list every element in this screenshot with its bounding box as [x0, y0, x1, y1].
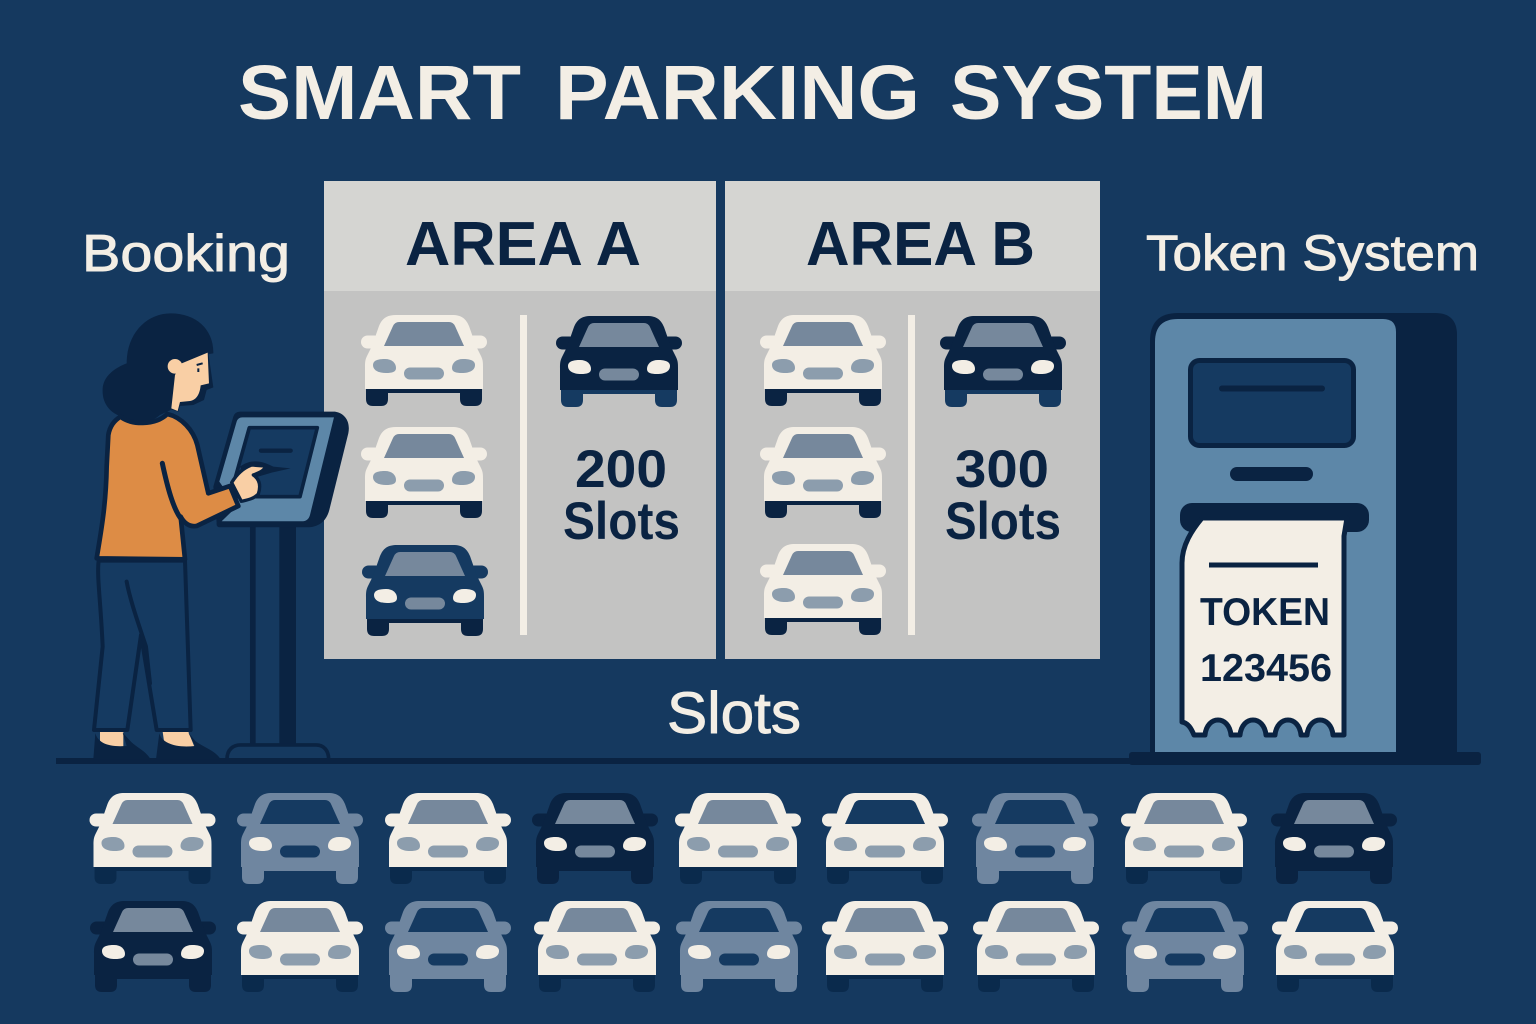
car 15 [822, 901, 948, 992]
label: 200 slots: 200 [575, 440, 667, 499]
heading: Token System: Token System [1146, 225, 1479, 281]
car 13 [534, 901, 660, 992]
car row 1 [90, 793, 1397, 884]
car 16 [973, 901, 1099, 992]
kiosk screen [213, 412, 349, 527]
car row 2 [90, 901, 1398, 992]
ticket text: TOKEN: TOKEN [1200, 591, 1330, 634]
car: Area A navy [362, 545, 488, 636]
car 12 [385, 901, 511, 992]
title: PARKING [555, 50, 920, 136]
car 8 [1121, 793, 1247, 884]
title: SYSTEM [950, 50, 1267, 136]
token machine [1129, 313, 1481, 765]
label: 300 slots: 300 [955, 440, 1049, 499]
car: Area A white 1 [361, 315, 487, 406]
ticket text: number: 123456 [1200, 647, 1332, 690]
hand [232, 465, 265, 501]
car 18 [1272, 901, 1398, 992]
feet and shoes [93, 732, 221, 759]
car: Area B white 2 [760, 427, 886, 518]
car 4 [532, 793, 658, 884]
hair [103, 313, 213, 423]
heading: Area A: AREA A [405, 210, 641, 279]
person at booking kiosk [93, 313, 349, 759]
panel: Area B [725, 181, 1100, 659]
car 7 [972, 793, 1098, 884]
label: Area B slots word: Slots [945, 492, 1061, 551]
car: Area A white 2 [361, 427, 487, 518]
car: Area B white 1 [760, 315, 886, 406]
car: Area A dark [556, 316, 682, 407]
trousers [94, 561, 191, 730]
car 5 [675, 793, 801, 884]
button slot [1230, 467, 1313, 481]
trouser fold [127, 582, 150, 683]
car 6 [822, 793, 948, 884]
car 9 [1271, 793, 1397, 884]
machine base [1129, 752, 1481, 765]
machine body [1150, 313, 1457, 760]
machine screen [1190, 360, 1354, 446]
ground line [56, 758, 1136, 764]
printer slot [1180, 503, 1369, 532]
car 3 [385, 793, 511, 884]
car: Area B dark [940, 316, 1066, 407]
ticket [1182, 518, 1347, 735]
car 2 [237, 793, 363, 884]
label: Area A slots word: Slots [563, 492, 680, 551]
heading: Area B: AREA B [806, 210, 1035, 279]
heading: Slots: Slots [667, 681, 801, 746]
car 11 [237, 901, 363, 992]
car 14 [676, 901, 802, 992]
car: Area B white 3 [760, 544, 886, 635]
heading: Booking: Booking [82, 225, 290, 283]
title: SMART [238, 50, 521, 136]
kiosk stand [227, 525, 329, 759]
car 1 [90, 793, 216, 884]
car 10 [90, 901, 216, 992]
title [238, 50, 1267, 136]
car 17 [1122, 901, 1248, 992]
ticket rule [1209, 562, 1318, 568]
face [168, 353, 213, 412]
sweater [97, 414, 238, 559]
sleeve fold [162, 463, 182, 520]
panel: Area A [324, 181, 716, 659]
